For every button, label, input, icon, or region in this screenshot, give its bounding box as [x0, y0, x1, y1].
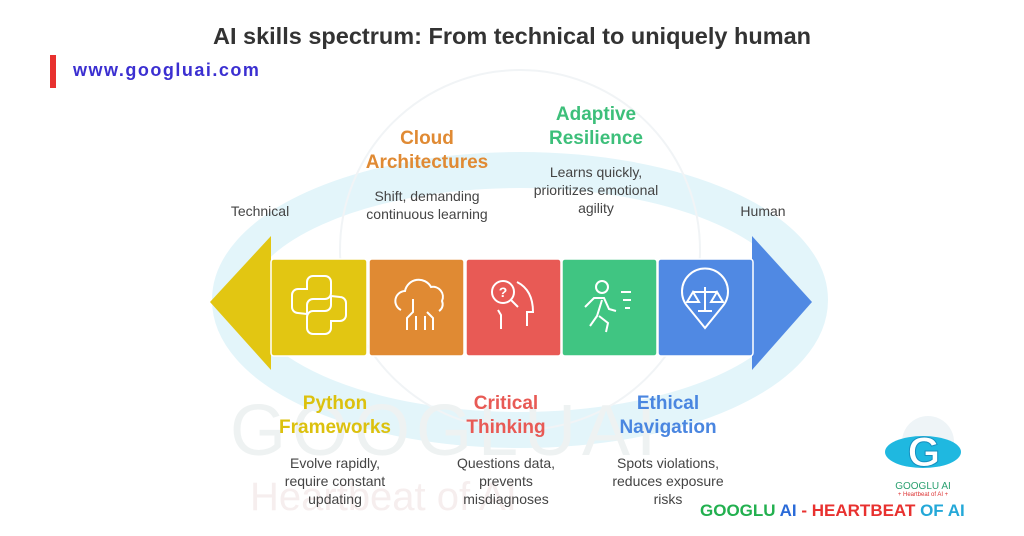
skill: python frameworks: Frameworks — [279, 417, 391, 438]
skill: adaptive resilience: Adaptive — [556, 104, 636, 125]
skill: critical thinking: prevents — [479, 473, 533, 489]
skill: adaptive resilience: prioritizes emotional — [534, 182, 658, 198]
skill: ethical navigation: Spots violations, — [617, 455, 719, 471]
url header — [50, 55, 260, 88]
skill: adaptive resilience: Resilience — [549, 128, 643, 149]
skill: critical thinking: misdiagnoses — [463, 491, 549, 507]
logo: G — [908, 428, 940, 475]
skill: python frameworks: require constant — [285, 473, 385, 489]
skill: python frameworks: updating — [308, 491, 362, 507]
watermark background: Heartbeat of AI — [250, 475, 517, 519]
title: AI skills spectrum: From technical to uniquely human — [213, 23, 811, 49]
spectrum arrow — [210, 236, 812, 370]
skill: ethical navigation: Navigation — [619, 417, 717, 438]
url header: www.googluai.com — [73, 60, 260, 80]
skill: cloud architectures — [366, 128, 488, 222]
skill: python frameworks — [279, 393, 391, 507]
skill: critical thinking: Questions data, — [457, 455, 555, 471]
skill: python frameworks: Evolve rapidly, — [290, 455, 380, 471]
icon box: question head: ? — [499, 284, 507, 300]
skill: ethical navigation: reduces exposure — [612, 473, 724, 489]
icon box: runner — [562, 259, 657, 356]
skill: adaptive resilience — [534, 104, 658, 216]
skill: cloud architectures: Architectures — [366, 152, 488, 173]
text: Human — [740, 203, 786, 219]
footer tagline: GOOGLU AI - HEARTBEAT OF AI — [700, 501, 965, 520]
skill: critical thinking — [457, 393, 555, 507]
icon box: question head — [466, 259, 561, 356]
skill: ethical navigation: Ethical — [637, 393, 699, 414]
logo: GOOGLU AI — [895, 481, 951, 492]
icon box: cloud — [369, 259, 464, 356]
skill: ethical navigation — [612, 393, 724, 507]
logo — [885, 416, 961, 498]
skill: adaptive resilience: agility — [578, 200, 614, 216]
skill: critical thinking: Critical — [474, 393, 538, 414]
icon box: python — [271, 259, 367, 356]
skill: cloud architectures: continuous learning — [366, 206, 488, 222]
skill: cloud architectures: Shift, demanding — [374, 188, 480, 204]
watermark background: GOOGLUAI — [230, 391, 662, 471]
logo: + Heartbeat of AI + — [898, 492, 948, 498]
icon box: ethics scale — [658, 259, 753, 356]
skill: cloud architectures: Cloud — [400, 128, 454, 149]
axis labels: Technical — [231, 203, 289, 219]
skill: critical thinking: Thinking — [466, 417, 546, 438]
skill: python frameworks: Python — [303, 393, 367, 414]
skill: ethical navigation: risks — [654, 491, 682, 507]
skill: adaptive resilience: Learns quickly, — [550, 164, 642, 180]
